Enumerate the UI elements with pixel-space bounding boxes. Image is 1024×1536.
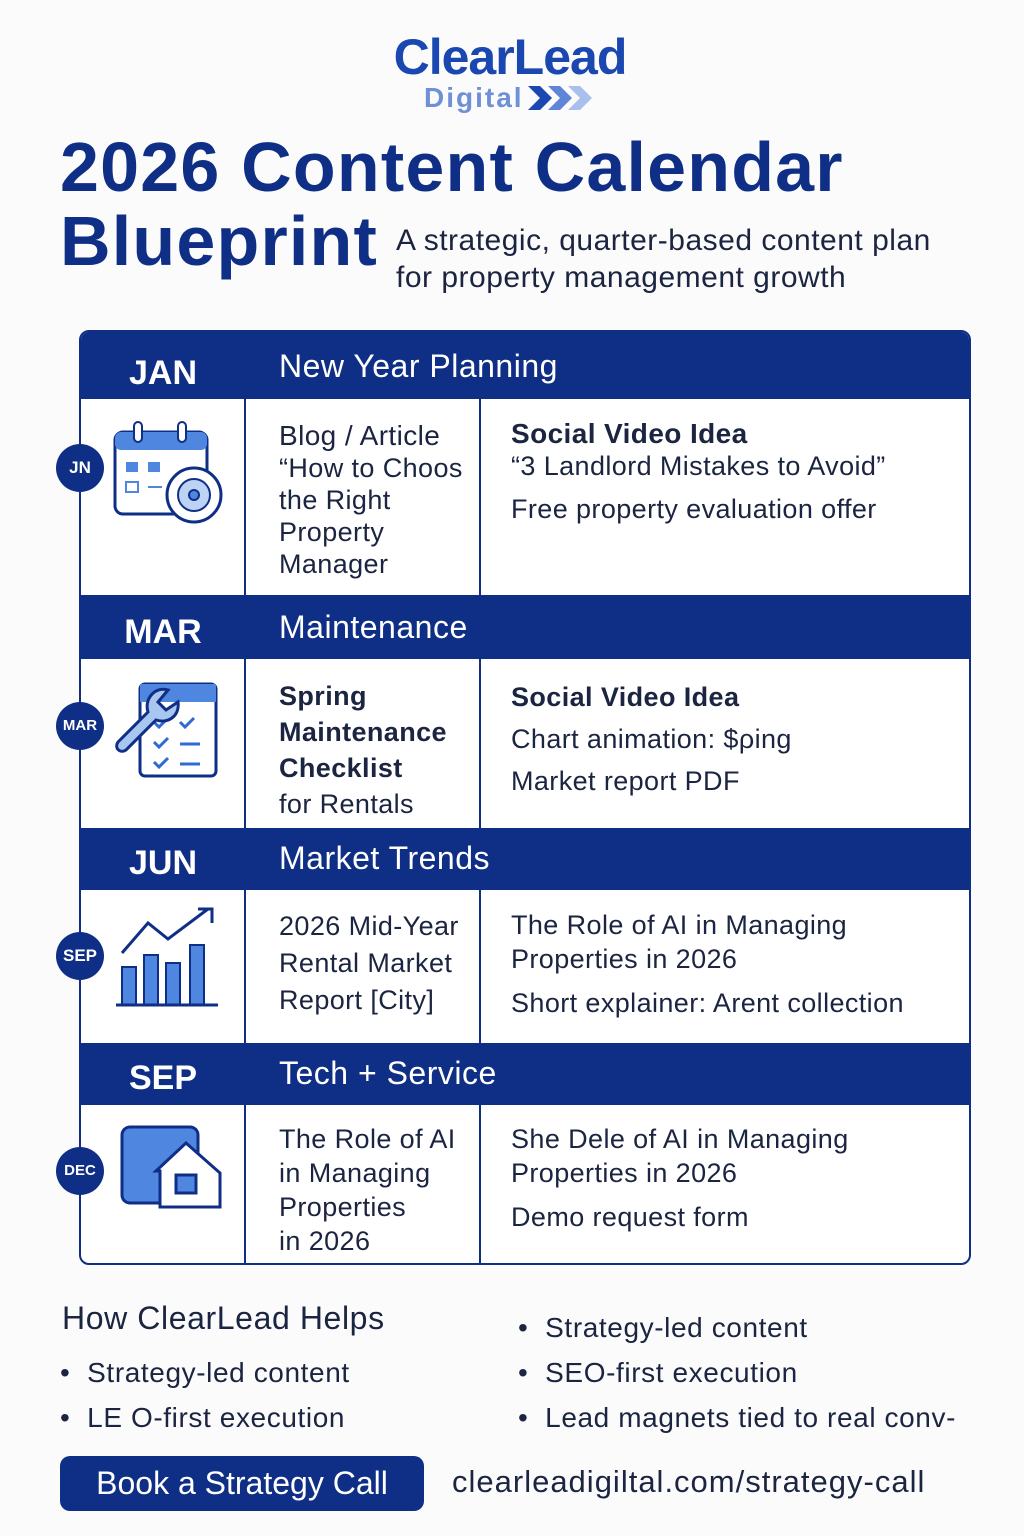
text: JUN report: Report [City] — [279, 985, 434, 1015]
panel: JAN header: JAN — [129, 354, 197, 392]
text: JAN video: Free property evaluation offer — [511, 494, 877, 524]
text: JAN video: “3 Landlord Mistakes to Avoid” — [511, 451, 886, 481]
text: JUN AI — [511, 910, 904, 1018]
text: MAR video: Market report PDF — [511, 766, 740, 796]
text: SEP article: in Managing — [279, 1158, 431, 1188]
panel: JAN header — [81, 332, 969, 399]
list: left bullets — [60, 1357, 350, 1433]
text: JAN blog: Manager — [279, 549, 388, 579]
text: JUN report: 2026 Mid-Year — [279, 911, 459, 941]
title: 2026 Content Calendar — [60, 128, 844, 206]
text: JUN report: Rental Market — [279, 948, 452, 978]
heading: How ClearLead Helps: How ClearLead Helps — [62, 1300, 385, 1336]
text: MAR blog — [279, 681, 447, 819]
list: right bullets: • SEO-first execution — [518, 1357, 798, 1388]
subtitle — [396, 224, 931, 294]
text: SEP video: Properties in 2026 — [511, 1158, 737, 1188]
timeline circles: JN — [69, 458, 91, 477]
url: clearleadigiltal.com/strategy-call — [452, 1464, 925, 1499]
timeline circles: DEC — [64, 1162, 96, 1179]
button: Book a Strategy Call — [60, 1456, 424, 1511]
title — [60, 128, 844, 280]
text: SEP video: Demo request form — [511, 1202, 749, 1232]
text: SEP article: The Role of AI — [279, 1124, 456, 1154]
text: MAR blog: Checklist — [279, 753, 403, 783]
subtitle: for property management growth — [396, 261, 846, 294]
panel: JUN header — [81, 828, 969, 890]
panel: JAN header: New Year Planning — [279, 348, 558, 384]
logo: ClearLead — [394, 29, 626, 85]
panel: SEP header — [81, 1043, 969, 1105]
icon: smart house — [120, 1126, 222, 1208]
list: left bullets: • Strategy-led content — [60, 1357, 350, 1388]
calendar table — [79, 330, 971, 1265]
list: right bullets: • Lead magnets tied to real conv- — [518, 1402, 956, 1433]
text: SEP article: in 2026 — [279, 1226, 370, 1256]
text: JUN report — [279, 911, 459, 1015]
icon: wrench checklist — [115, 682, 218, 778]
text: JUN AI: The Role of AI in Managing — [511, 910, 847, 940]
text: MAR blog: Maintenance — [279, 717, 447, 747]
panel: JUN header: Market Trends — [279, 840, 490, 876]
text: JUN AI: Properties in 2026 — [511, 944, 737, 974]
text: JUN AI: Short explainer: Arent collection — [511, 988, 904, 1018]
list: right bullets — [518, 1312, 956, 1433]
panel: MAR header: Maintenance — [279, 609, 468, 645]
title: Blueprint — [60, 202, 378, 280]
text: SEP video: She Dele of AI in Managing — [511, 1124, 849, 1154]
logo — [394, 29, 626, 113]
text: JAN video — [511, 418, 886, 524]
text: SEP article — [279, 1124, 456, 1256]
icon: calendar — [114, 421, 222, 524]
text: MAR blog: Spring — [279, 681, 367, 711]
text: MAR video: Chart animation: $ρing — [511, 724, 792, 754]
list: right bullets: • Strategy-led content — [518, 1312, 808, 1343]
panel: MAR header: MAR — [124, 613, 202, 651]
button: Book a Strategy Call: Book a Strategy Call — [96, 1465, 388, 1501]
text: JAN blog: Property — [279, 517, 384, 547]
panel: MAR header — [81, 595, 969, 659]
list: left bullets: • LE O-first execution — [60, 1402, 345, 1433]
timeline circles — [56, 444, 104, 1195]
timeline circles: MAR — [63, 717, 97, 734]
logo: Digital — [424, 82, 524, 113]
icon: bar chart — [116, 908, 218, 1006]
text: MAR video — [511, 682, 792, 796]
text: JAN blog — [279, 420, 463, 579]
panel: JUN header: JUN — [129, 844, 197, 882]
text: MAR video: Social Video Idea — [511, 682, 739, 712]
text: JAN blog: the Right — [279, 485, 391, 515]
timeline circles: SEP — [63, 946, 97, 965]
text: JAN blog: Blog / Article — [279, 420, 440, 451]
text: MAR blog: for Rentals — [279, 789, 414, 819]
panel: SEP header: SEP — [129, 1059, 197, 1097]
text: JAN video: Social Video Idea — [511, 418, 748, 449]
text: SEP video — [511, 1124, 849, 1232]
text: SEP article: Properties — [279, 1192, 406, 1222]
text: JAN blog: “How to Choos — [279, 453, 463, 483]
subtitle: A strategic, quarter-based content plan — [396, 224, 931, 257]
panel: SEP header: Tech + Service — [279, 1055, 497, 1091]
